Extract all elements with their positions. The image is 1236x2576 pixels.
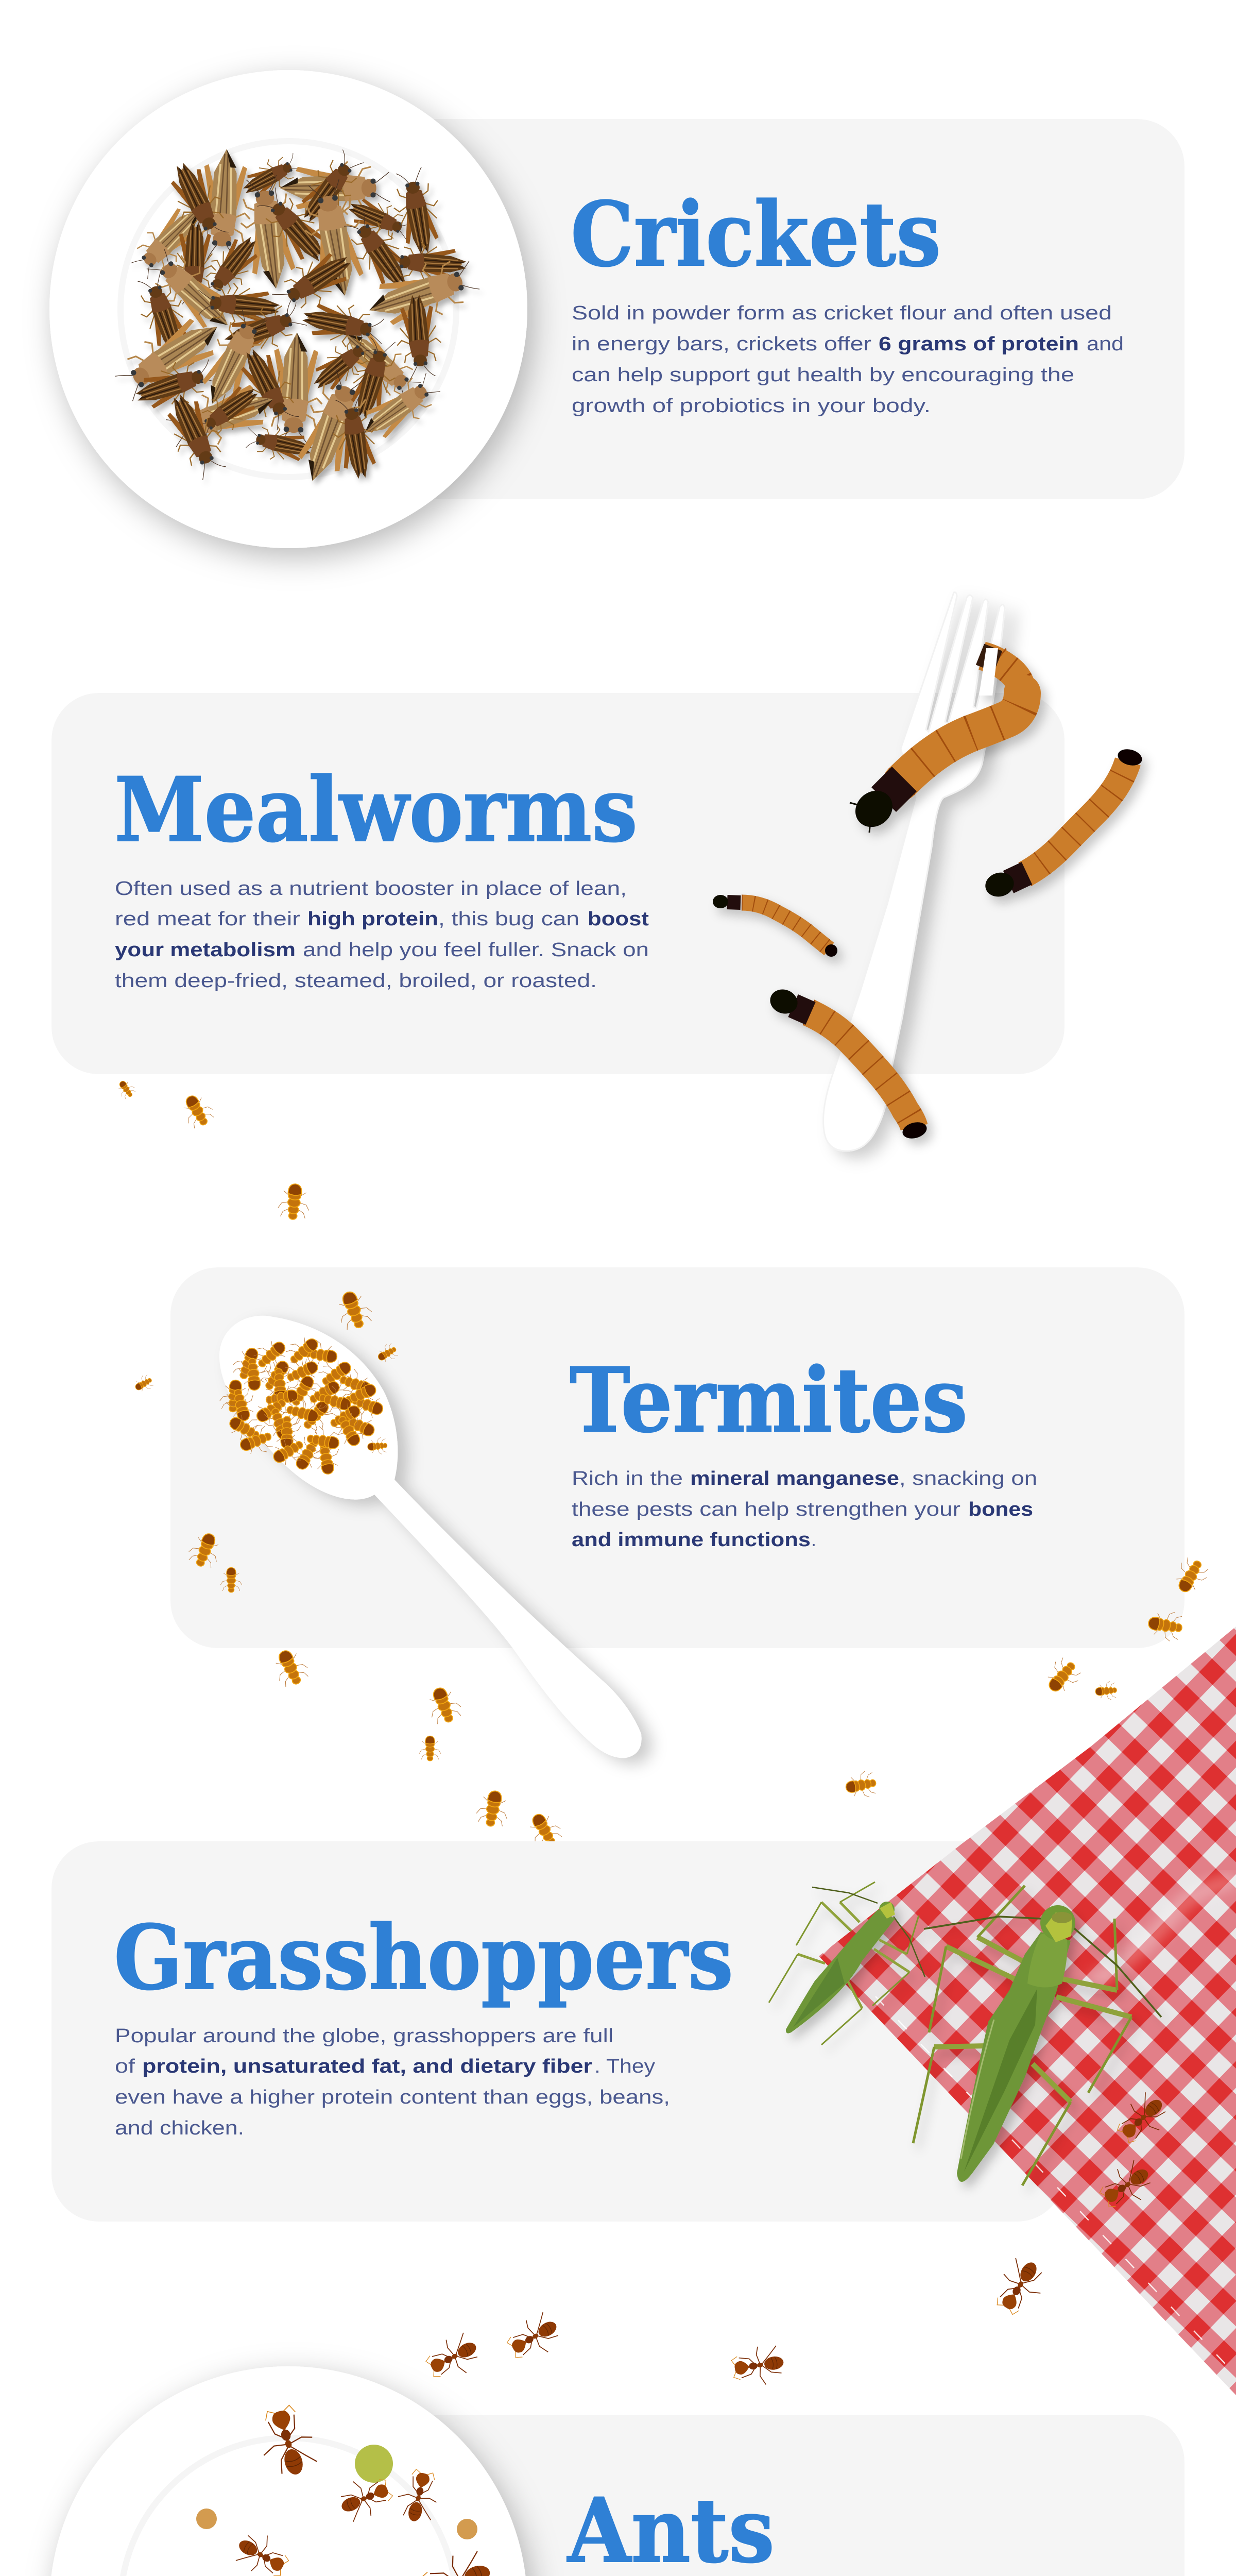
text: termites description: these pests can help strengthen your [572,1499,960,1520]
panel: termites [170,1267,1184,1648]
ants on plate [0,2401,496,2576]
panel: grasshoppers [52,1841,1065,2222]
illustration: pile of crickets [108,143,484,490]
panel: ants [360,2415,1184,2576]
text: crickets description: growth of probiotics in your body. [572,395,931,417]
ants on cloth and table [421,2088,1174,2389]
heading: Grasshoppers: Grasshoppers [114,1905,733,2010]
plate: crickets [49,70,527,548]
text: grasshoppers description: and chicken. [115,2117,244,2139]
text: mealworms description: and help you feel fuller. Snack on [303,939,649,961]
text: mealworms description [115,878,649,992]
heading: Crickets: Crickets [571,182,941,286]
text: crickets description: can help support gut health by encouraging the [572,364,1074,386]
text: grasshoppers description [115,2025,670,2139]
text: termites description [572,1468,1037,1551]
illustration: large grasshopper [913,1886,1161,2185]
text: mealworms description: your metabolism [115,939,296,961]
illustration: small grasshopper [769,1882,925,2045]
food crumbs on plate [135,2445,477,2576]
mealworm: right [983,747,1144,900]
mealworm: bottom [767,986,929,1141]
illustration: white spoon [219,1316,642,1758]
text: crickets description [572,302,1124,417]
text: termites description: bones [968,1499,1033,1520]
illustration: gingham picnic cloth [819,1626,1236,2395]
mealworm: large on fork [848,648,1022,835]
text: grasshoppers description: . They [594,2056,655,2077]
panel: mealworms [52,693,1065,1074]
loose termites [115,1077,1212,1852]
text: crickets description: Sold in powder form as cricket flour and often used [572,302,1112,324]
text: termites description: . [811,1529,816,1551]
text: termites description: , snacking on [899,1468,1037,1489]
text: grasshoppers description: of [115,2056,135,2077]
text: termites description: and immune functions [572,1529,811,1551]
heading: Termites: Termites [570,1348,968,1452]
text: mealworms description: Often used as a nutrient booster in place of lean, [115,878,627,900]
text: grasshoppers description: protein, unsaturated fat, and dietary fiber [142,2056,592,2077]
text: mealworms description: them deep-fried, steamed, broiled, or roasted. [115,970,597,992]
text: grasshoppers description: even have a higher protein content than eggs, beans, [115,2087,670,2108]
plate: ants [49,2366,527,2576]
illustration: mealworms [713,648,1144,1141]
text: termites description: mineral manganese [690,1468,899,1489]
text: crickets description: and [1087,333,1124,355]
text: crickets description: in energy bars, crickets offer [572,333,871,355]
text: grasshoppers description: Popular around the globe, grasshoppers are full [115,2025,613,2047]
panel: crickets [360,119,1184,499]
text: termites description: Rich in the [572,1468,683,1489]
text: mealworms description: boost [588,908,649,930]
text: mealworms description: , this bug can [438,908,579,930]
text: mealworms description: high protein [307,908,438,930]
text: mealworms description: red meat for their [115,908,300,930]
illustration: termites on spoon [218,1330,388,1477]
mealworm: small left [713,895,837,957]
text: crickets description: 6 grams of protein [879,333,1079,355]
illustration: white fork [823,592,1005,1151]
heading: Mealworms: Mealworms [114,757,638,862]
